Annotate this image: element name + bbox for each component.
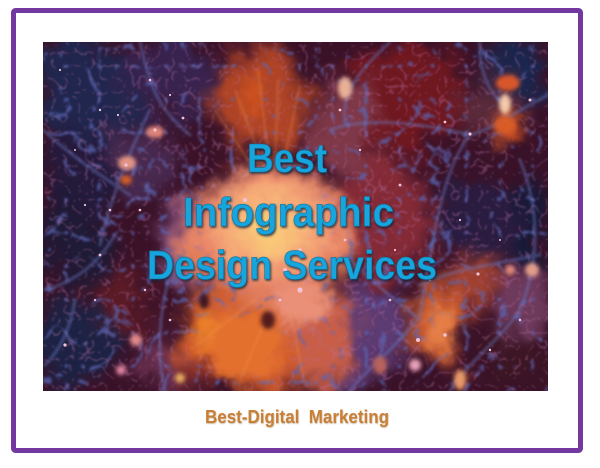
web filaments texture (43, 42, 548, 391)
colour regions (35, 35, 550, 395)
title line: Infographic: Infographic (183, 189, 394, 235)
bright nodes (116, 75, 539, 390)
title line: Best: Best (247, 135, 327, 181)
title (147, 135, 437, 288)
filaments (43, 42, 548, 391)
star points (59, 69, 532, 351)
caption: Best-Digital Marketing (205, 407, 389, 427)
bright core and hot spots (185, 75, 530, 379)
cosmic web photograph (35, 35, 550, 395)
rays from the core (190, 70, 305, 385)
title line: Design Services: Design Services (147, 242, 437, 288)
